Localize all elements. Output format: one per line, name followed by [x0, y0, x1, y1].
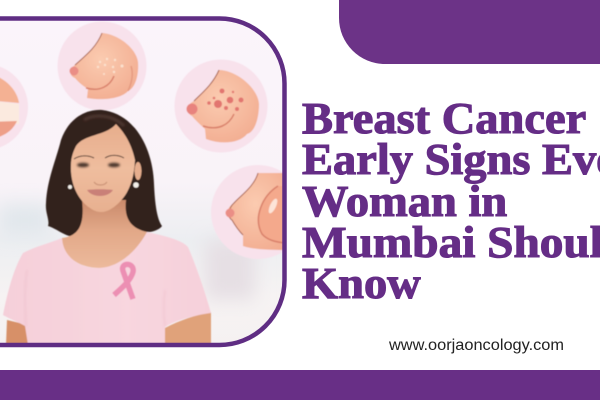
photo background	[0, 19, 284, 345]
title: Know	[302, 259, 421, 308]
nose	[94, 182, 107, 185]
title	[302, 94, 600, 308]
website URL: www.oorjaoncology.com	[388, 337, 564, 354]
hair highlight	[84, 116, 124, 126]
pink T-shirt	[3, 232, 211, 345]
illustration: left circle	[0, 64, 28, 150]
bottom purple bar	[0, 370, 600, 400]
title: Woman in	[302, 177, 507, 226]
illustration: circle with red spots	[174, 60, 268, 152]
right arm	[165, 312, 211, 345]
eyes	[77, 163, 120, 167]
woman	[3, 110, 211, 345]
left arm	[6, 320, 29, 345]
neck	[62, 200, 147, 268]
hair back	[46, 110, 162, 238]
top-right purple banner	[339, 0, 600, 64]
illustration: circle with dimpled skin	[58, 22, 146, 110]
face	[71, 124, 135, 212]
shirt sleeve shading	[25, 270, 165, 327]
panel: photo of woman with breast-change illustrations	[0, 18, 305, 345]
purple panel border	[0, 18, 285, 345]
title: Breast Cancer	[302, 94, 586, 143]
pink ribbon	[114, 264, 133, 299]
ear and earrings	[134, 162, 142, 180]
illustration: circle with swelling	[211, 165, 282, 258]
lips: smile	[87, 189, 113, 196]
